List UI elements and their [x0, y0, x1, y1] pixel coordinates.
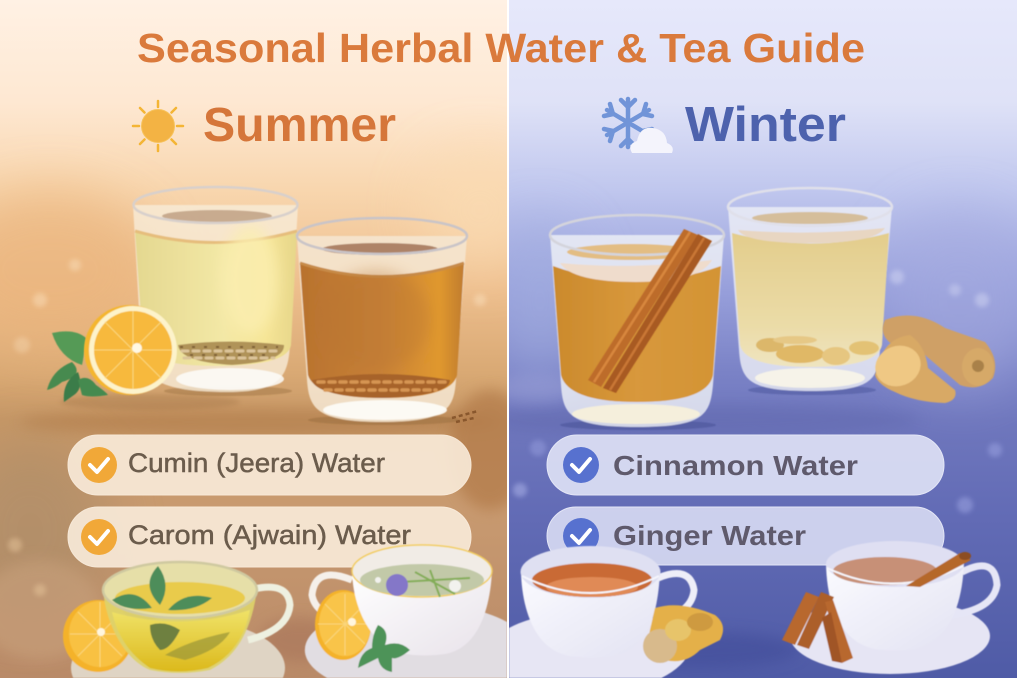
check icon	[563, 518, 599, 554]
title: Seasonal Herbal Water & Tea Guide	[137, 25, 865, 71]
cup: white cup with herbs and flower	[305, 545, 507, 678]
icon: cinnamon stick in cup	[906, 552, 971, 587]
glass: ginger water	[728, 188, 892, 395]
label: Cinnamon Water	[613, 450, 858, 481]
heading: Summer: Summer	[203, 99, 396, 152]
pill: Carom (Ajwain) Water	[68, 507, 471, 567]
check icon	[81, 447, 117, 483]
icon: snowflake with cloud	[604, 99, 673, 153]
heading: Winter: Winter	[685, 98, 846, 152]
check icon	[563, 447, 599, 483]
glass: yellow cumin water	[133, 187, 298, 396]
label: Carom (Ajwain) Water	[128, 520, 411, 550]
cup: white cup with red tea and ginger	[509, 546, 723, 678]
icon: ginger pieces	[643, 605, 723, 663]
cup: glass tea with mint and lemon	[63, 562, 290, 678]
glass: cinnamon water	[550, 215, 724, 430]
check icon	[81, 519, 117, 555]
label: Ginger Water	[613, 520, 806, 551]
center divider	[507, 0, 509, 678]
pill: Cinnamon Water	[547, 435, 944, 495]
spilled seeds left	[452, 411, 478, 422]
panel: winter background	[480, 0, 1017, 678]
icon: lemon half	[84, 305, 177, 395]
cup: white cup with cinnamon tea	[782, 541, 997, 674]
icon: sun	[133, 101, 183, 151]
glass: amber water	[297, 218, 467, 425]
panel: summer background	[0, 0, 540, 678]
icon: cinnamon sticks in glass	[588, 229, 712, 393]
label: Cumin (Jeera) Water	[128, 448, 385, 478]
icon: mint leaves summer	[47, 331, 108, 402]
icon: cinnamon sticks on saucer	[782, 592, 853, 663]
pill: Cumin (Jeera) Water	[68, 435, 471, 495]
icon: ginger root	[870, 316, 995, 403]
pill: Ginger Water	[547, 507, 944, 565]
